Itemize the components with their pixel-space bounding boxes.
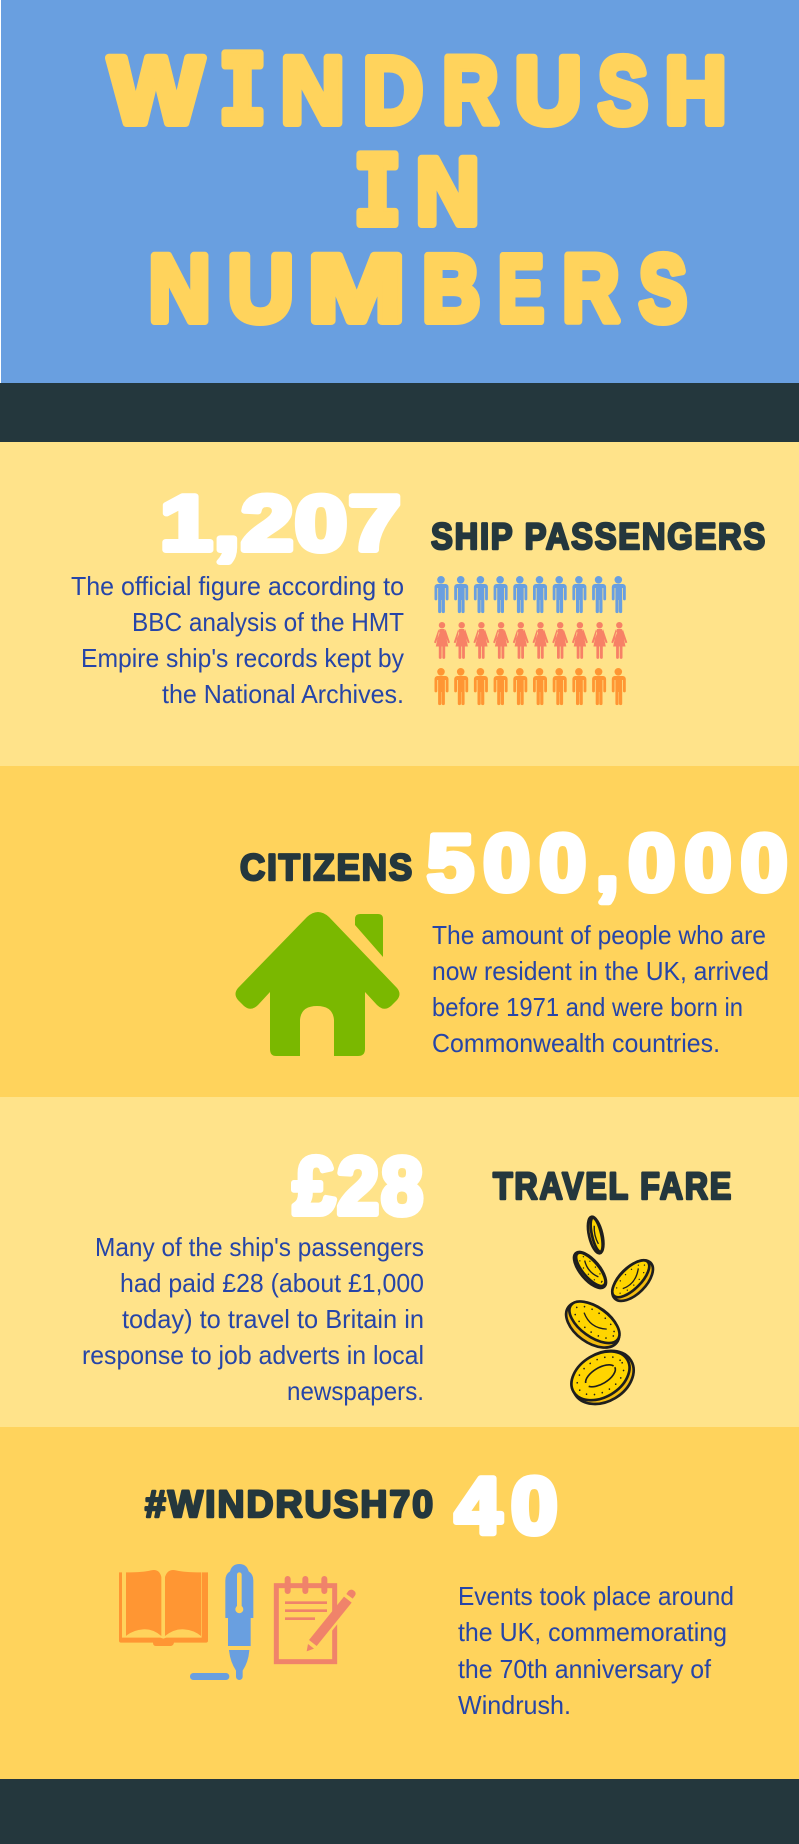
title text: W: [109, 38, 203, 144]
passengers description: BBC analysis of the HMT: [132, 607, 404, 637]
big number 40: 40: [455, 1461, 567, 1550]
title text: M: [308, 236, 405, 342]
big number 1,207: 1,207: [160, 479, 402, 567]
fare description: had paid £28 (about £1,000: [120, 1268, 424, 1298]
dark divider band: [0, 383, 799, 442]
title text: N: [416, 139, 480, 245]
icon: fountain pen: [190, 1564, 253, 1680]
icon: house: [236, 912, 400, 1056]
panel: citizens: [0, 766, 799, 1097]
events description: the UK, commemorating: [458, 1617, 727, 1647]
title text: S: [639, 236, 687, 342]
title text: R: [442, 38, 498, 144]
title text: B: [422, 236, 480, 342]
citizens description: The amount of people who are: [432, 920, 766, 950]
citizens description: now resident in the UK, arrived: [432, 956, 769, 986]
icon: falling coins: [558, 1215, 660, 1415]
title text: S: [598, 38, 648, 144]
citizens description: Commonwealth countries.: [432, 1028, 720, 1058]
fare description: [82, 1232, 424, 1406]
title text: I: [353, 137, 402, 247]
icon: coral women row: [434, 622, 627, 659]
events description: Events took place around: [458, 1581, 734, 1611]
title banner: [0, 0, 799, 383]
fare description: newspapers.: [287, 1376, 424, 1406]
heading: travel fare: TRAVEL FARE: [493, 1166, 733, 1208]
citizens description: [432, 920, 769, 1058]
passengers description: [71, 571, 404, 709]
passengers description: the National Archives.: [162, 679, 404, 709]
panel: windrush70: [0, 1427, 799, 1779]
heading: #windrush70: #WINDRUSH70: [145, 1484, 435, 1526]
panel: travel fare: [0, 1097, 799, 1427]
fare description: response to job adverts in local: [82, 1340, 424, 1370]
big number £28: £28: [293, 1141, 425, 1232]
passengers description: Empire ship's records kept by: [81, 643, 404, 673]
icon: blue men row: [434, 576, 626, 613]
title text: N: [281, 38, 345, 144]
title text: H: [665, 38, 727, 144]
events description: [458, 1581, 734, 1720]
title text: D: [363, 38, 423, 144]
title text: I: [218, 36, 267, 146]
panel: ship passengers: [0, 442, 799, 766]
icon: orange men row: [434, 668, 626, 705]
title text: R: [562, 236, 619, 342]
icon: open book: [119, 1570, 208, 1646]
title text: E: [498, 236, 544, 342]
icon: notepad and pencil: [276, 1576, 356, 1662]
fare description: today) to travel to Britain in: [122, 1304, 424, 1334]
title text: [109, 36, 727, 342]
passengers description: The official figure according to: [71, 571, 404, 601]
heading: citizens: CITIZENS: [240, 847, 414, 888]
title text: U: [515, 38, 582, 144]
big number 500,000: 500,000: [427, 818, 797, 907]
title text: N: [149, 236, 211, 342]
events description: the 70th anniversary of: [458, 1654, 712, 1684]
fare description: Many of the ship's passengers: [95, 1232, 424, 1262]
title text: U: [228, 236, 294, 342]
events description: Windrush.: [458, 1690, 571, 1720]
citizens description: before 1971 and were born in: [432, 992, 743, 1022]
dark footer band: [0, 1779, 799, 1844]
